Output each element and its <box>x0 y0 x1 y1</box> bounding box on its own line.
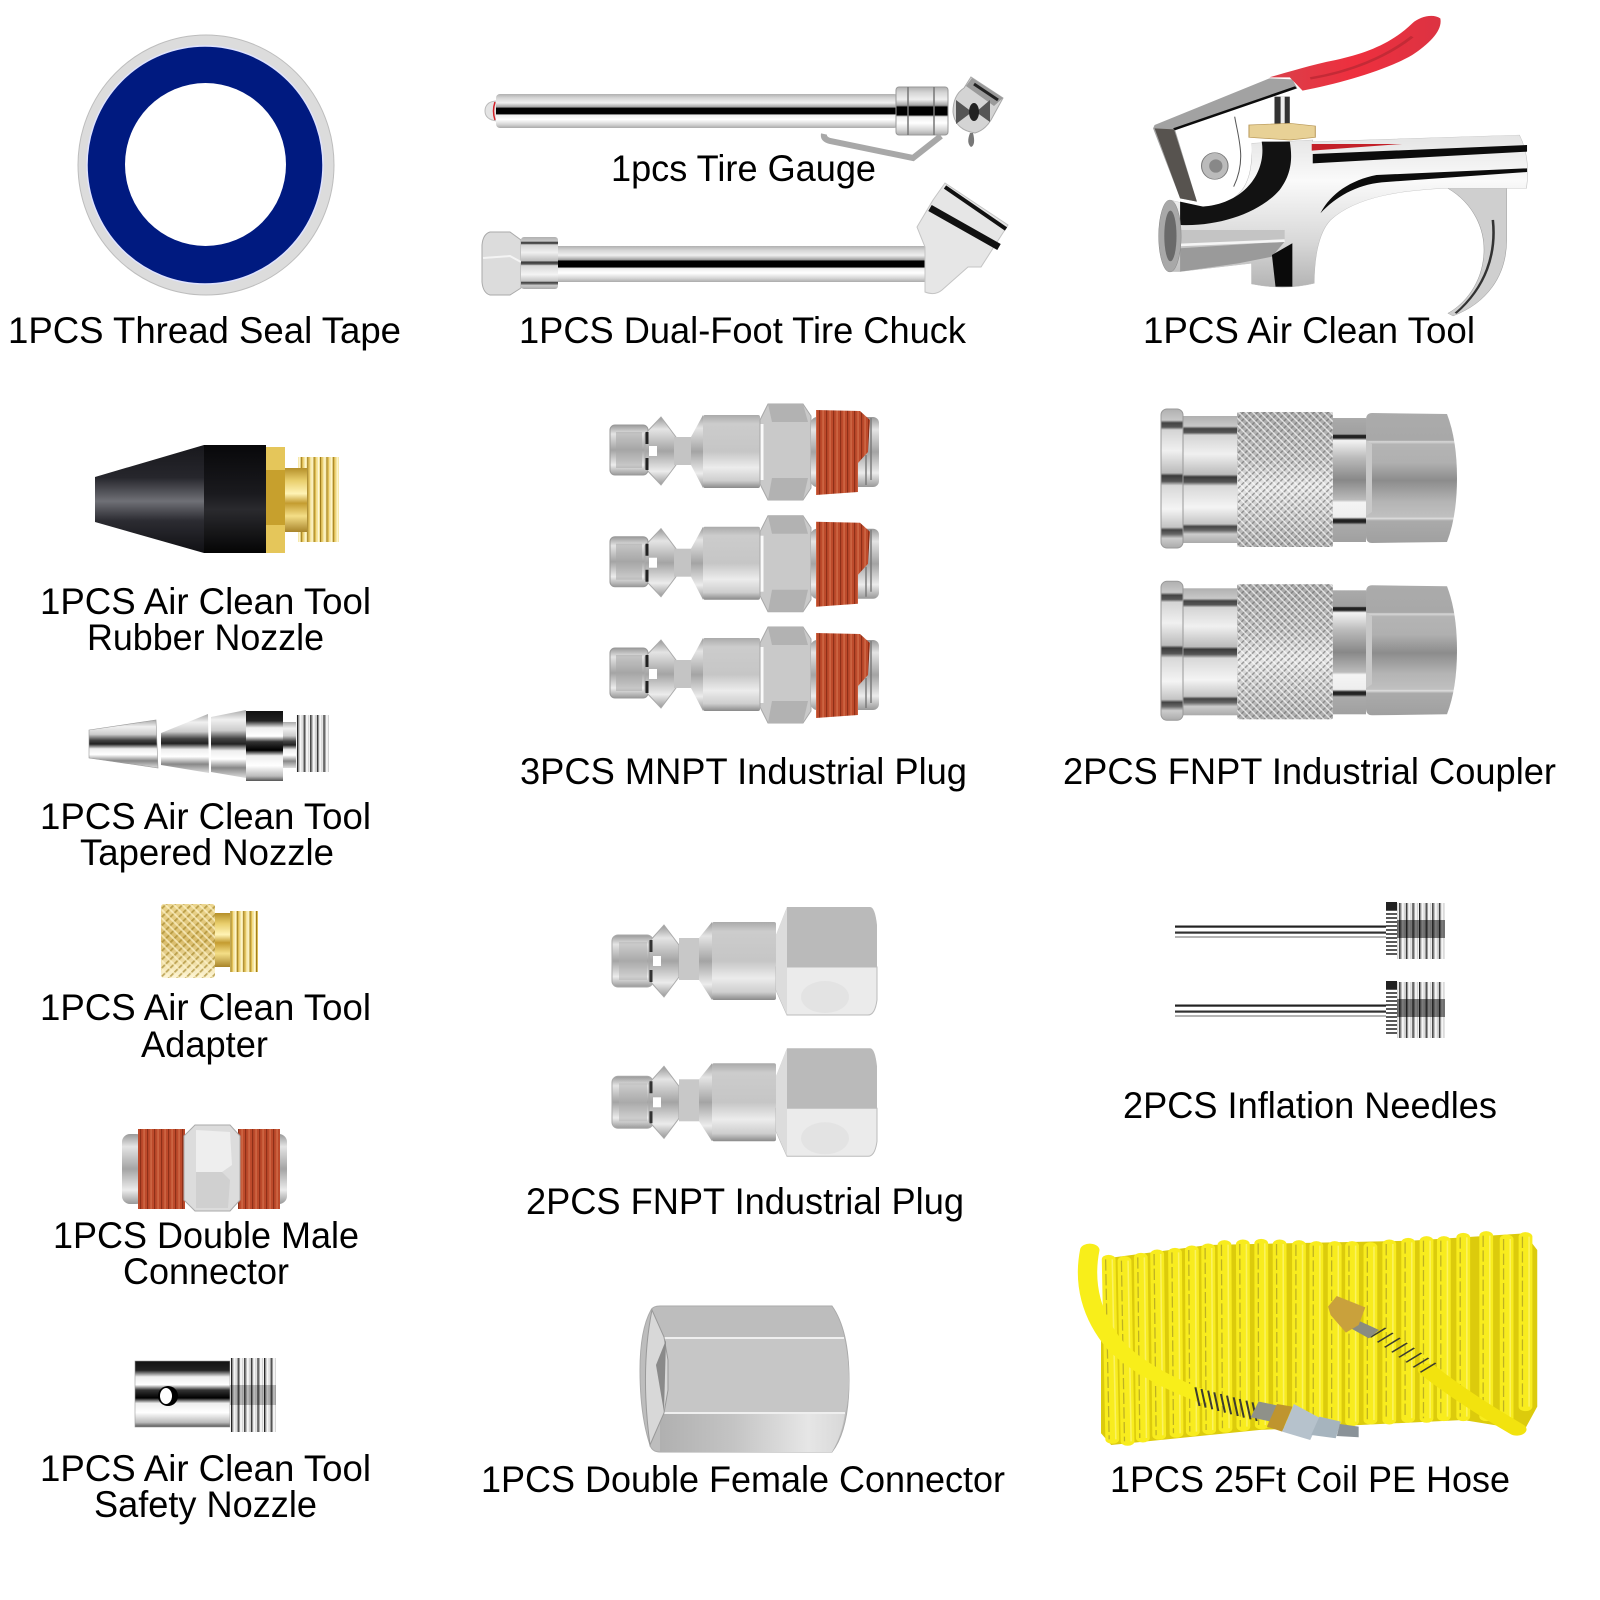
icon: double male connector <box>122 1125 287 1211</box>
panel: rubber nozzle <box>40 445 371 658</box>
label: inflation needles: 2PCS Inflation Needles <box>1123 1085 1497 1126</box>
icon: two FNPT plugs <box>612 907 877 1156</box>
label: double female connector: 1PCS Double Female Connector <box>481 1459 1005 1500</box>
label: adapter: Adapter <box>141 1024 268 1065</box>
icon: tapered nozzle <box>89 710 329 781</box>
label: FNPT plug: 2PCS FNPT Industrial Plug <box>526 1181 964 1222</box>
label: safety nozzle: Safety Nozzle <box>94 1484 317 1525</box>
panel: tire gauge <box>485 77 1003 189</box>
icon: double female connector <box>640 1306 849 1452</box>
label: dual-foot tire chuck: 1PCS Dual-Foot Tire Chuck <box>519 310 966 351</box>
icon: rubber nozzle <box>95 445 339 553</box>
panel: coil hose <box>1088 1233 1537 1500</box>
label: air clean tool: 1PCS Air Clean Tool <box>1143 310 1475 351</box>
icon: three MNPT plugs <box>610 404 879 723</box>
icon: safety nozzle <box>135 1358 276 1432</box>
label: tapered nozzle: 1PCS Air Clean Tool <box>40 796 371 837</box>
panel: inflation needles <box>1123 902 1497 1126</box>
label: tapered nozzle: Tapered Nozzle <box>80 832 334 873</box>
label: thread seal tape: 1PCS Thread Seal Tape <box>8 310 401 351</box>
panel: thread seal tape <box>8 35 401 351</box>
label: double male connector: 1PCS Double Male <box>53 1215 359 1256</box>
label: rubber nozzle: 1PCS Air Clean Tool <box>40 581 371 622</box>
label: safety nozzle: 1PCS Air Clean Tool <box>40 1448 371 1489</box>
label: MNPT plug: 3PCS MNPT Industrial Plug <box>520 751 967 792</box>
panel: FNPT industrial couplers <box>1063 409 1556 792</box>
panel: double female connector <box>481 1306 1005 1500</box>
label: tapered nozzle <box>40 796 371 873</box>
panel: FNPT industrial plugs <box>526 907 964 1222</box>
label: adapter <box>40 987 371 1065</box>
panel: dual-foot tire chuck <box>482 183 1008 351</box>
label: rubber nozzle <box>40 581 371 658</box>
label: double male connector: Connector <box>123 1251 289 1292</box>
icon: tire gauge <box>485 77 1003 158</box>
panel: double male connector <box>53 1125 359 1292</box>
icon: thread seal tape roll <box>78 35 334 295</box>
panel: MNPT industrial plugs <box>520 404 967 792</box>
panel: safety nozzle <box>40 1358 371 1525</box>
label: double male connector <box>53 1215 359 1292</box>
icon: yellow coil hose <box>1088 1233 1537 1445</box>
icon: two FNPT couplers <box>1161 409 1457 720</box>
panel: adapter <box>40 904 371 1065</box>
panel: air clean tool <box>1143 16 1528 351</box>
icon: dual-foot tire chuck <box>482 183 1008 295</box>
label: tire gauge: 1pcs Tire Gauge <box>611 148 876 189</box>
label: coil hose: 1PCS 25Ft Coil PE Hose <box>1110 1459 1510 1500</box>
label: adapter: 1PCS Air Clean Tool <box>40 987 371 1028</box>
icon: air blow gun <box>1153 16 1528 316</box>
panel: tapered nozzle <box>40 710 371 873</box>
label: safety nozzle <box>40 1448 371 1525</box>
label: rubber nozzle: Rubber Nozzle <box>87 617 324 658</box>
icon: two inflation needles <box>1175 902 1445 1039</box>
label: FNPT coupler: 2PCS FNPT Industrial Coupler <box>1063 751 1556 792</box>
icon: brass adapter <box>161 904 258 978</box>
